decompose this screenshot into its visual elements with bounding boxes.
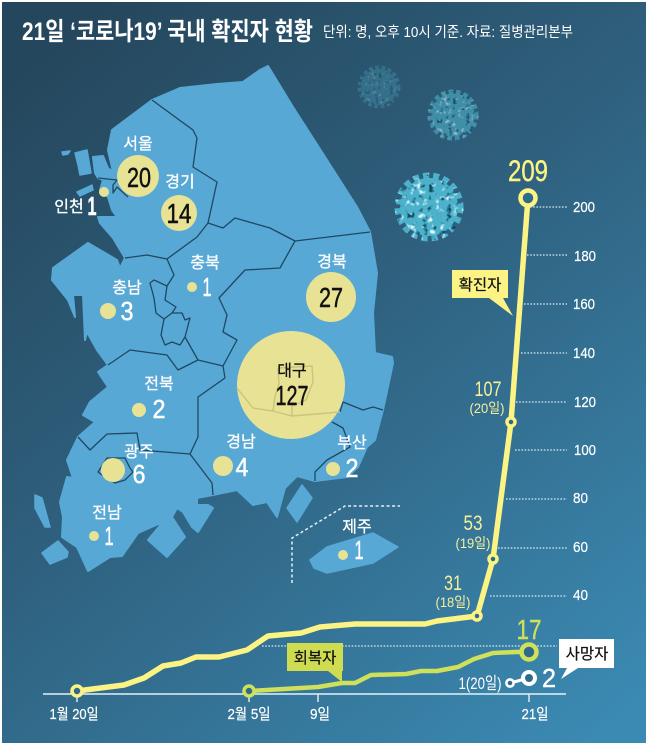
x axis with date labels: 9일: [310, 706, 330, 723]
bubble: Jeonbuk: [132, 375, 174, 424]
bubble: Gyeongbuk: 27: [319, 282, 343, 313]
value: 53 on the 19th: 53: [464, 512, 482, 535]
chart gridlines and y axis labels: 80: [573, 491, 588, 507]
title: [22, 18, 573, 46]
value: 31 on the 18th: [436, 572, 470, 610]
bubble: Gyeongnam: 4: [236, 452, 248, 482]
line: deaths: 1(20일): [458, 674, 502, 693]
bubble: Jeju: [338, 518, 372, 565]
bubble: Gyeongbuk: 경북: [317, 253, 347, 271]
map of South Korea: [35, 66, 398, 573]
bubble: Seoul: 서울: [123, 135, 153, 153]
bubble: Chungbuk: [187, 254, 220, 302]
chart gridlines and y axis labels: 140: [573, 346, 595, 362]
value: 17: 17: [516, 614, 542, 645]
bubble: Jeonnam: [89, 504, 122, 551]
line: recovered: [244, 614, 542, 696]
callout: deaths: 사망자: [566, 645, 608, 663]
x axis with date labels: 1월 20일: [50, 706, 98, 723]
chart gridlines and y axis labels: 100: [574, 443, 596, 459]
bubble: Jeonnam: 1: [104, 521, 114, 551]
bubble: Seoul: 20: [127, 162, 151, 193]
line: deaths: [458, 663, 556, 693]
bubble: Jeonbuk: 전북: [144, 375, 174, 393]
bubble: Gyeongnam: [213, 433, 256, 482]
subtitle: unit and source: 단위: 명, 오후 10시 기준. 자료: 질병관리본부: [323, 24, 573, 41]
callout: deaths: [559, 639, 614, 679]
bubble: Incheon: [54, 187, 109, 221]
chart gridlines and y axis labels: 60: [573, 540, 588, 556]
bubble: Gwangju: [101, 443, 154, 489]
bubble: Chungnam: [100, 279, 142, 326]
icon: virus medium: [430, 92, 476, 138]
bubble: Jeonnam: 전남: [92, 504, 122, 522]
chart gridlines and y axis labels: 120: [574, 395, 596, 411]
bubble: Gyeonggi: 경기: [165, 173, 195, 191]
bubble: Gyeonggi: 14: [166, 198, 192, 229]
mainland: [52, 66, 393, 571]
icon: virus large: [398, 176, 460, 238]
icon: virus faint: [360, 68, 398, 106]
chart gridlines and y axis labels: 200: [573, 200, 595, 216]
bubble: Jeonbuk: 2: [152, 394, 166, 424]
bubble: Gyeongbuk: [306, 253, 356, 322]
bubble: Busan: 2: [346, 453, 358, 483]
value: 53 on the 19th: [456, 512, 490, 551]
line: deaths: 2: [542, 663, 556, 693]
callout: recovered: [287, 643, 343, 682]
chart gridlines and y axis labels: 40: [573, 588, 588, 604]
bubble: Incheon: 1: [88, 191, 96, 221]
x axis with date labels: 21일: [522, 706, 548, 723]
bubble: Daegu: 127: [276, 380, 308, 411]
bubble: Jeju: 제주: [342, 518, 372, 536]
bubble: Gyeongnam: 경남: [226, 433, 256, 451]
bubble: Gwangju: 6: [132, 459, 146, 489]
province borders: [78, 100, 383, 495]
islands: [35, 150, 398, 573]
callout: confirmed: 확진자: [459, 276, 501, 294]
value: 31 on the 18th: (18일): [436, 594, 470, 610]
value: 31 on the 18th: 31: [444, 572, 462, 595]
callout: confirmed: [452, 270, 513, 316]
bubble: Incheon: 인천: [54, 198, 84, 216]
bubble: Daegu: 대구: [277, 362, 307, 380]
bubble: Gyeonggi: [161, 173, 197, 231]
value: 107 on the 20th: [470, 378, 504, 416]
chart gridlines and y axis labels: 160: [573, 297, 595, 313]
line: confirmed cases: [72, 155, 548, 696]
bubble: Chungbuk: 충북: [190, 254, 220, 272]
Jeju inset dashed line: [292, 506, 400, 583]
bubble: Jeju: 1: [354, 535, 364, 565]
value: 107 on the 20th: (20일): [470, 400, 504, 416]
bubble: Seoul: [117, 135, 159, 197]
value: 107 on the 20th: 107: [474, 378, 502, 401]
x axis with date labels: [43, 694, 566, 723]
x axis with date labels: 2월 5일: [228, 706, 270, 723]
bubble: Daegu: [237, 331, 345, 439]
chart gridlines and y axis labels: 180: [574, 249, 596, 265]
callout: recovered: 회복자: [294, 649, 336, 667]
bubble: Chungbuk: 1: [202, 272, 212, 302]
chart gridlines and y axis labels: [262, 200, 596, 646]
bubble: Chungnam: 충남: [112, 279, 142, 297]
bubble: Gwangju: 광주: [124, 443, 154, 461]
bubble: Busan: 부산: [337, 434, 367, 452]
title: 21일 ‘코로나19’ 국내 확진자 현황: [22, 18, 313, 46]
bubble: Busan: [326, 434, 367, 483]
value: 209: 209: [508, 155, 548, 188]
bubble: Chungnam: 3: [120, 296, 134, 326]
value: 53 on the 19th: (19일): [456, 535, 490, 551]
